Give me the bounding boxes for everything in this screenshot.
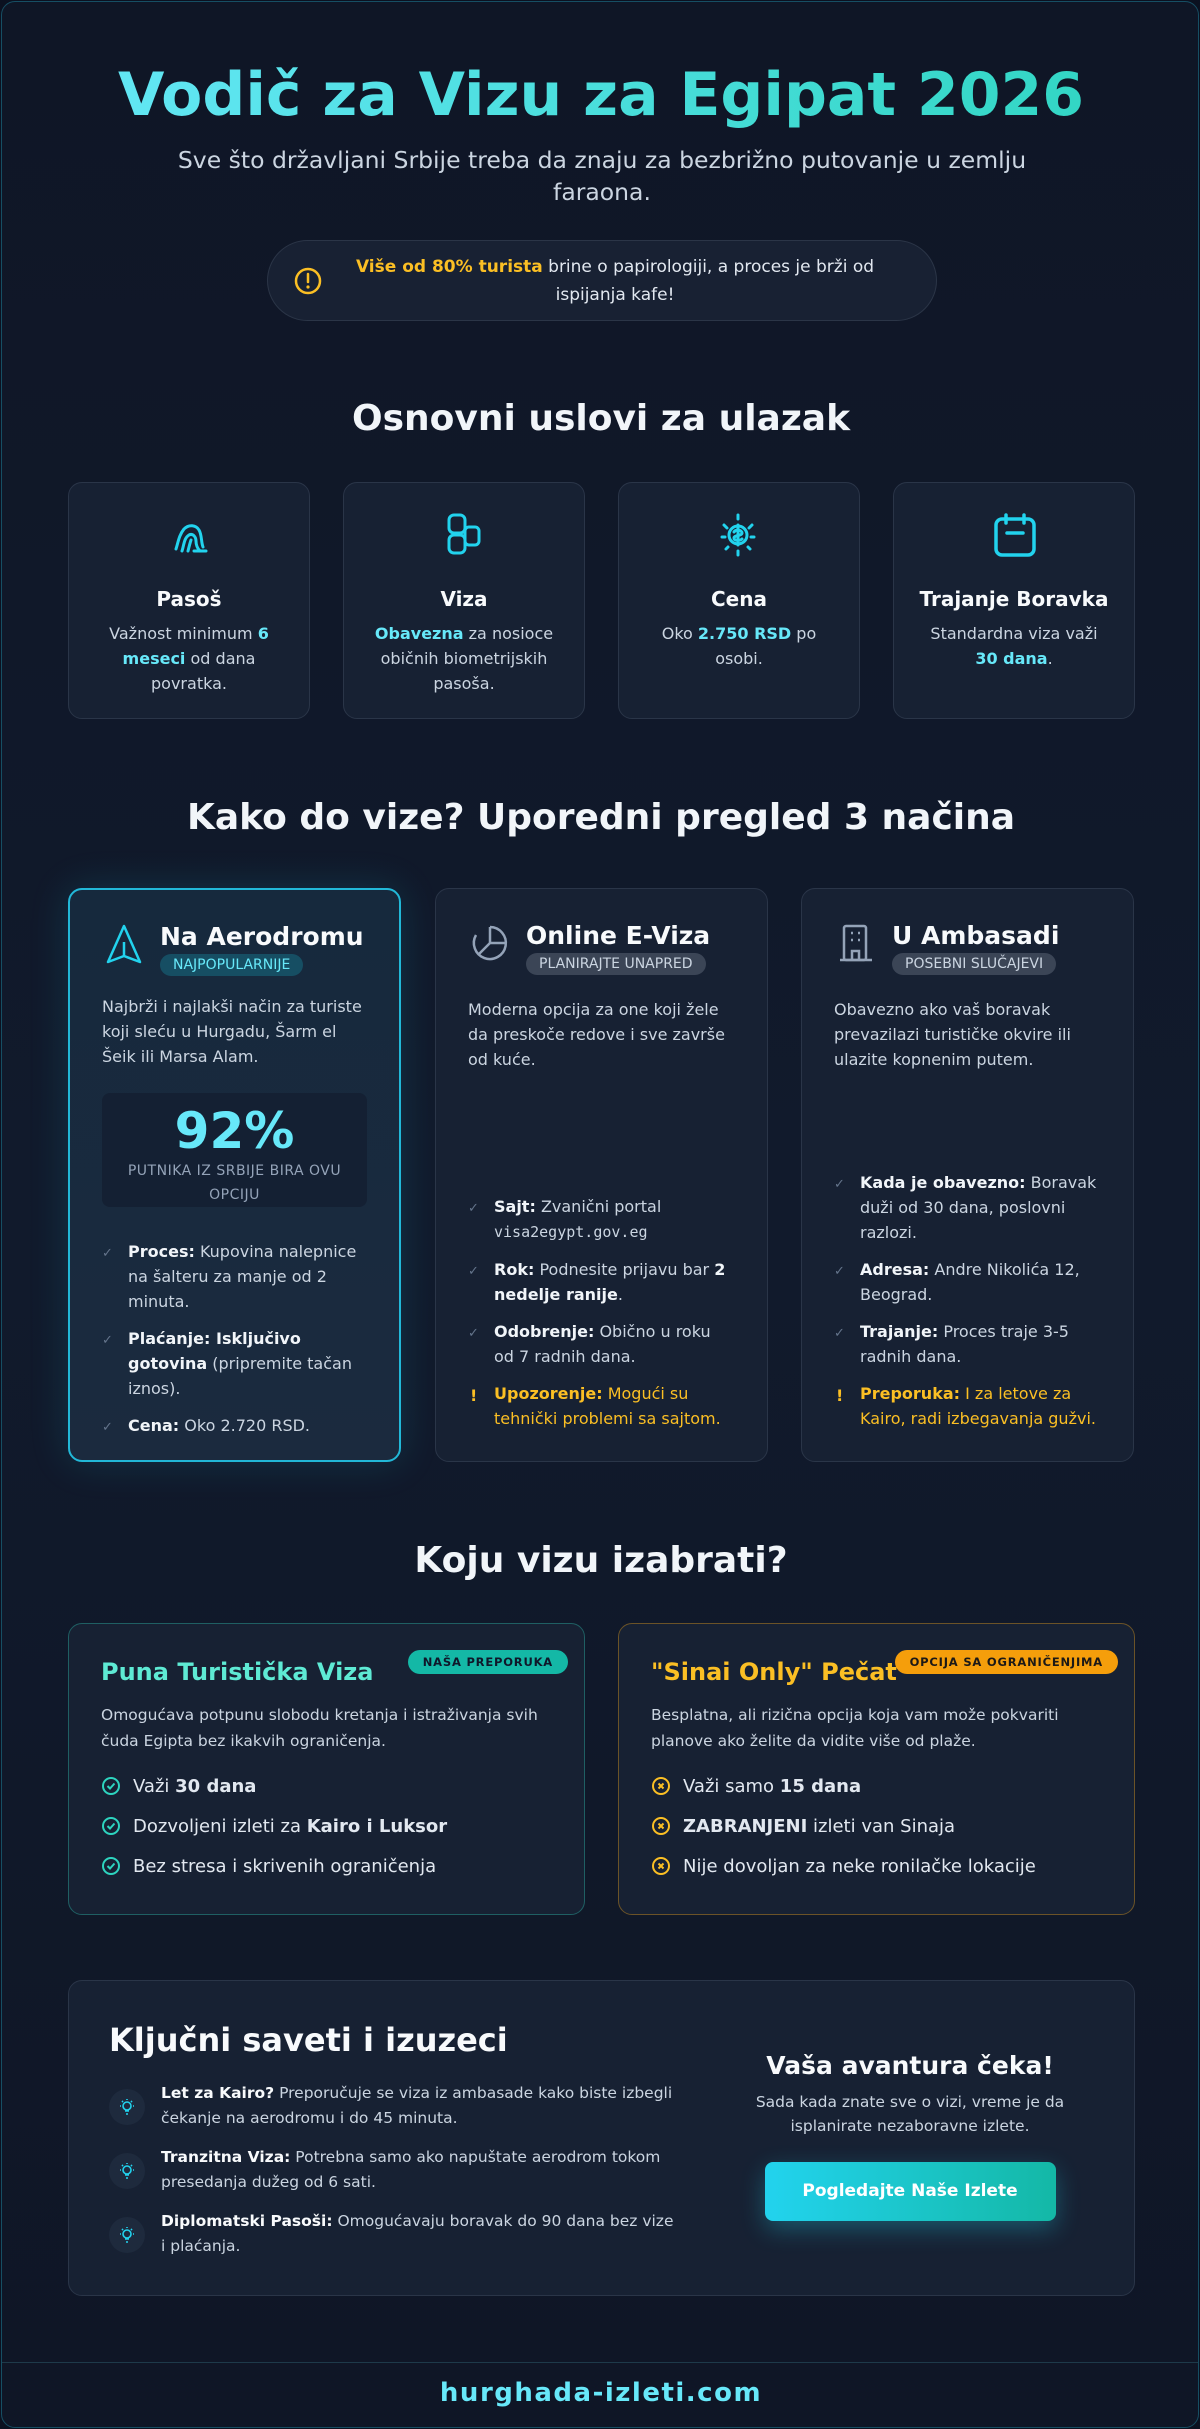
panel: Cena: [618, 482, 860, 719]
tip: diplomatic: Diplomatski Pasoši: Omogućavaju boravak do 90 dana bez vize i plaćanja.: [161, 2212, 673, 2255]
badge: limited: OPCIJA SA OGRANIČENJIMA: [910, 1655, 1103, 1669]
panel: full tourist visa: [68, 1623, 585, 1915]
panel: Pasoš: [68, 482, 310, 719]
heading: entry requirements: Osnovni uslovi za ulazak: [352, 398, 850, 439]
panel: Cena: Oko 2.750 RSD po osobi.: [662, 624, 816, 668]
icon: building: [840, 924, 872, 962]
tip: Cairo: Let za Kairo? Preporučuje se viza iz ambasade kako biste izbegli čekanje na aerodromu i do 45 minuta.: [161, 2084, 672, 2127]
panel: Pasoš: Važnost minimum 6 meseci od dana povratka.: [109, 624, 269, 693]
panel: full tourist visa: Puna Turistička Viza: [101, 1658, 373, 1686]
panel: e-visa: [435, 888, 768, 1462]
panel: embassy: Adresa: Andre Nikolića 12, Beograd.: [860, 1260, 1080, 1304]
icon: calendar: [994, 513, 1036, 557]
panel: e-visa: Moderna opcija za one koji žele da preskoče redove i sve završe od kuće.: [468, 1000, 725, 1069]
panel: airport: Plaćanje: Isključivo gotovina (pripremite tačan iznos).: [128, 1329, 352, 1398]
button: [764, 2162, 1056, 2221]
badge: recommended: NAŠA PREPORUKA: [423, 1655, 553, 1669]
panel: airport: Proces: Kupovina nalepnice na šalteru za manje od 2 minuta.: [128, 1242, 356, 1311]
panel: e-visa: Rok: Podnesite prijavu bar 2 nedelje ranije.: [494, 1260, 725, 1304]
heading: comparison: Kako do vize? Uporedni pregled 3 načina: [187, 797, 1015, 838]
panel: Sinai only: "Sinai Only" Pečat: [651, 1658, 897, 1686]
call to action: [754, 2051, 1068, 2240]
panel: Sinai only: Nije dovoljan za neke ronilačke lokacije: [683, 1856, 1036, 1876]
icon: fingerprint: [174, 524, 208, 553]
panel: embassy: Obavezno ako vaš boravak prevazilazi turističke okvire ili ulazite kopnenim putem.: [834, 1000, 1071, 1069]
badge: limited: [895, 1650, 1118, 1674]
panel: airport: [68, 888, 401, 1462]
call to action: Vaša avantura čeka!: [766, 2051, 1054, 2080]
call to action: Sada kada znate sve o vizi, vreme je da isplanirate nezaboravne izlete.: [756, 2093, 1064, 2135]
panel: full tourist visa: Bez stresa i skrivenih ograničenja: [133, 1856, 436, 1876]
icon: visa: [448, 514, 480, 554]
panel: Viza: Obavezna za nosioce običnih biometrijskih pasoša.: [375, 624, 553, 693]
panel: full tourist visa: Važi 30 dana: [133, 1776, 256, 1796]
header: embassy: U Ambasadi: [892, 921, 1059, 950]
panel: Cena: Cena: [711, 587, 767, 611]
icon: globe: [472, 926, 508, 960]
panel: embassy: Preporuka: I za letove za Kairo, radi izbegavanja gužvi.: [860, 1384, 1096, 1428]
panel: Trajanje: Standardna viza važi: [930, 624, 1098, 643]
stat box: 92%: 92%: [175, 1102, 294, 1160]
header: airport: [106, 922, 364, 976]
header: e-visa: Online E-Viza: [526, 921, 710, 950]
heading: which visa: Koju vizu izabrati?: [414, 1540, 788, 1581]
header: embassy: [840, 921, 1059, 975]
panel: airport: Cena: Oko 2.720 RSD.: [128, 1416, 310, 1435]
panel: e-visa: Sajt: Zvanični portal visa2egypt.gov.eg: [494, 1197, 661, 1241]
panel: Sinai only: [618, 1623, 1135, 1915]
panel: Sinai only: ZABRANJENI izleti van Sinaja: [683, 1816, 955, 1836]
footer: website: hurghada-izleti.com: [440, 2378, 762, 2408]
panel: Trajanje: Trajanje Boravka: [920, 587, 1108, 611]
header: embassy: POSEBNI SLUČAJEVI: [905, 956, 1043, 972]
icon: plane: [106, 924, 142, 964]
panel: embassy: Kada je obavezno: Boravak duži od 30 dana, poslovni razlozi.: [860, 1173, 1096, 1242]
panel: Trajanje: [893, 482, 1135, 719]
panel: full tourist visa: Omogućava potpunu slobodu kretanja i istraživanja svih čuda Egipta bez ikakvih ograničenja.: [101, 1706, 538, 1750]
panel: Sinai only: Besplatna, ali rizična opcija koja vam može pokvariti planove ako želite da vidite više od plaže.: [651, 1706, 1059, 1750]
icon: price: [720, 514, 756, 556]
panel: embassy: Trajanje: Proces traje 3-5 radnih dana.: [860, 1322, 1069, 1366]
panel: embassy: [801, 888, 1134, 1462]
panel: airport: Najbrži i najlakši način za turiste koji sleću u Hurgadu, Šarm el Šeik ili Marsa Alam.: [102, 997, 362, 1066]
callout: stat pill: Više od 80% turista brine o papirologiji, a proces je brži od ispijanja kafe!: [356, 256, 874, 304]
subtitle: Sve što državljani Srbije treba da znaju za bezbrižno putovanje u zemlju faraona.: [178, 146, 1026, 206]
stat box: 92%: PUTNIKA IZ SRBIJE BIRA OVU OPCIJU: [128, 1163, 341, 1203]
header: airport: Na Aerodromu: [160, 922, 364, 951]
heading: tips: Ključni saveti i izuzeci: [109, 2021, 508, 2059]
panel: e-visa: Upozorenje: Mogući su tehnički problemi sa sajtom.: [494, 1384, 721, 1428]
stat box: 92%: [102, 1093, 367, 1207]
header: e-visa: [472, 921, 710, 975]
tip: transit: Tranzitna Viza: Potrebna samo ako napuštate aerodrom tokom presedanja dužeg od 6 sati.: [161, 2148, 660, 2191]
header: airport: NAJPOPULARNIJE: [173, 957, 290, 973]
button: Pogledajte Naše Izlete: [802, 2181, 1018, 2201]
header: e-visa: PLANIRAJTE UNAPRED: [539, 956, 693, 972]
panel: e-visa: Odobrenje: Obično u roku od 7 radnih dana.: [494, 1322, 711, 1366]
panel: full tourist visa: Dozvoljeni izleti za Kairo i Luksor: [133, 1816, 447, 1836]
badge: recommended: [408, 1650, 568, 1674]
panel: Sinai only: Važi samo 15 dana: [683, 1776, 861, 1796]
callout: stat pill: [267, 240, 937, 321]
panel: Viza: Viza: [440, 587, 488, 611]
title: Vodič za Vizu za Egipat 2026: [118, 60, 1084, 130]
panel: tips: [68, 1980, 1135, 2296]
panel: Viza: [343, 482, 585, 719]
icon: warning: [294, 268, 322, 294]
panel: Trajanje: 30 dana.: [975, 649, 1053, 668]
panel: Pasoš: Pasoš: [156, 587, 222, 611]
